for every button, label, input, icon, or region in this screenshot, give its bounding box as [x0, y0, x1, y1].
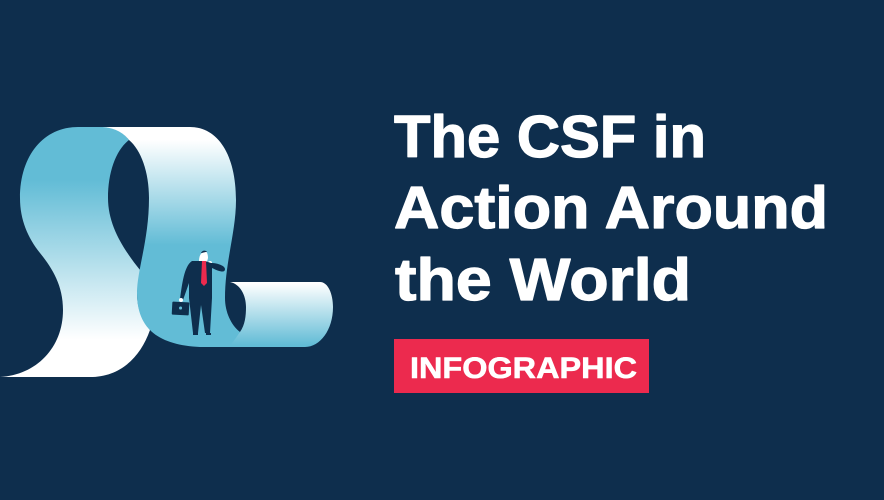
badge: infographic: INFOGRAPHIC — [410, 352, 637, 385]
badge: infographic — [394, 339, 649, 393]
hand at head — [208, 261, 212, 265]
ribbon: left band — [0, 127, 150, 377]
title: Action Around — [394, 175, 828, 241]
title — [394, 104, 828, 313]
ribbon: tail section — [215, 282, 333, 347]
suit — [180, 261, 225, 333]
businessman — [172, 251, 225, 335]
head — [199, 252, 208, 262]
hand on briefcase — [179, 298, 183, 302]
title: The CSF in — [394, 104, 706, 170]
shoes — [193, 333, 211, 335]
briefcase — [172, 302, 189, 315]
necktie — [201, 261, 207, 286]
illustration: paper ribbon with businessman — [0, 127, 333, 377]
title: the World — [395, 247, 691, 313]
ribbon: middle band — [100, 127, 240, 347]
hair — [201, 251, 207, 253]
